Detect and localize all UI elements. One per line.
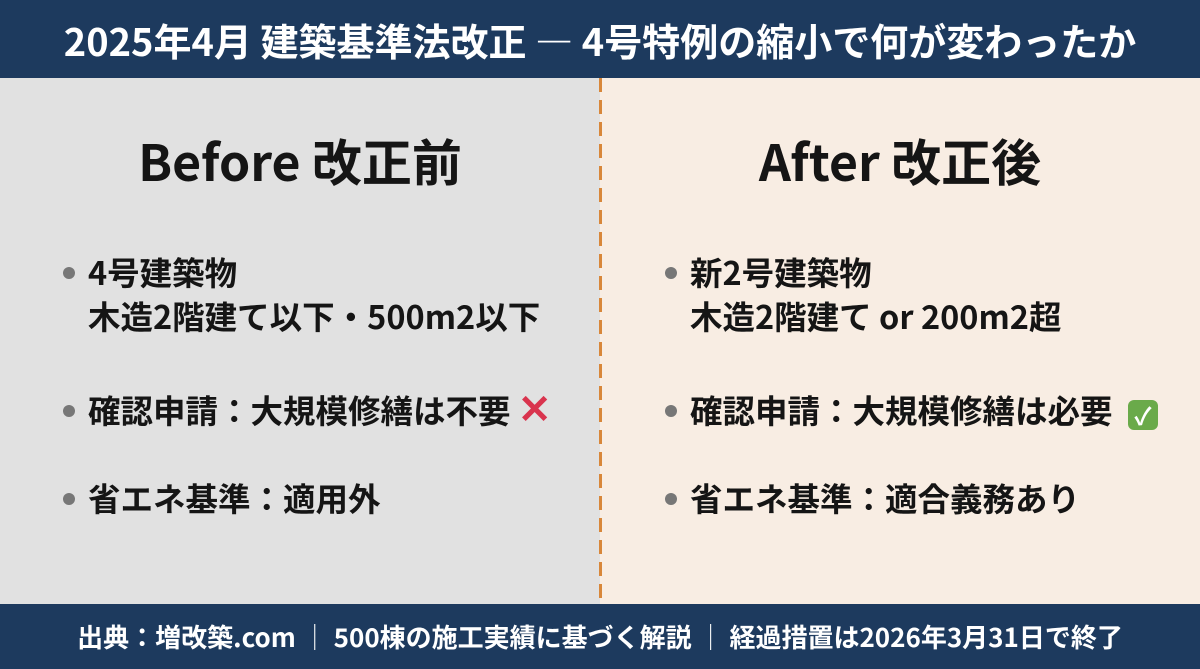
bullet: 確認申請 必要: 確認申請：大規模修繕は必要	[690, 386, 1113, 433]
panel: after	[600, 78, 1200, 604]
footer	[0, 604, 1200, 669]
footer: 出典：増改築.com │ 500棟の施工実績に基づく解説 │ 経過措置は2026年3月31日で終了	[77, 618, 1123, 655]
title	[0, 0, 1200, 78]
heading: before: Before 改正前	[138, 124, 462, 196]
bullet: 新2号建築物: 新2号建築物	[690, 248, 872, 295]
bullet: 4号建築物: 4号建築物	[88, 248, 237, 295]
bullet: 4号建築物	[88, 250, 540, 338]
bullet: 省エネ 適用外: 省エネ基準：適用外	[88, 474, 381, 521]
bullet: 省エネ 義務: 省エネ基準：適合義務あり	[690, 474, 1080, 521]
bullet: 4号建築物: 木造2階建て以下・500m2以下	[88, 292, 540, 339]
bullet: 新2号建築物	[690, 250, 1061, 338]
title: 2025年4月 建築基準法改正 ― 4号特例の縮小で何が変わったか	[64, 12, 1136, 66]
heading: after: After 改正後	[759, 124, 1041, 196]
bullet: 新2号建築物: 木造2階建て or 200m2超	[690, 292, 1061, 339]
bullet: 確認申請 必要: ✓	[1134, 397, 1152, 432]
panel: before	[0, 78, 600, 604]
bullet: 確認申請 不要: 確認申請：大規模修繕は不要 ✕	[88, 377, 551, 435]
